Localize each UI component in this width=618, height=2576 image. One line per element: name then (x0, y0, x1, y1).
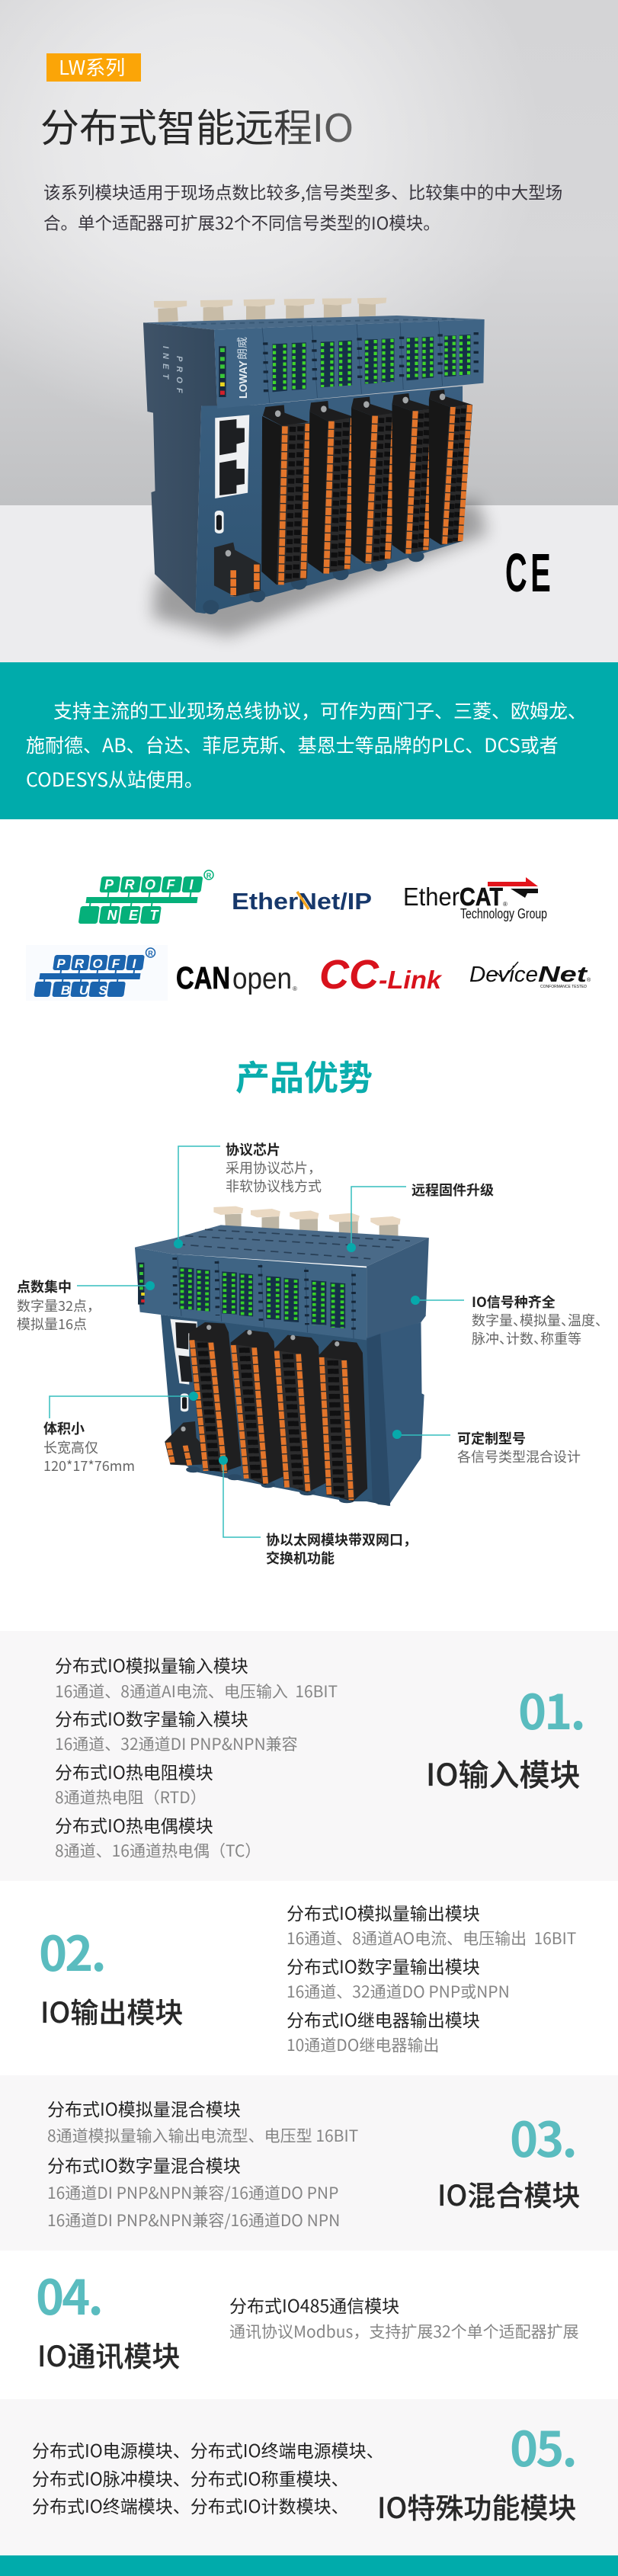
callout: customizable models: 可定制型号 (457, 1428, 526, 1448)
callout line: small size (50, 1392, 198, 1418)
module list: 8通道、16通道热电偶（TC） (55, 1839, 261, 1862)
terminal block 4 (392, 393, 437, 554)
support description (26, 697, 587, 793)
module list: 分布式IO模拟量输出模块 (287, 1899, 480, 1925)
product advantages diagram (49, 1145, 464, 1538)
heading: product advantages: 产品优势 (235, 1050, 373, 1100)
number 02: 02. (39, 1916, 104, 1985)
callout: small size (43, 1418, 135, 1475)
section heading: IO通讯模块 (37, 2334, 180, 2375)
module description: 分布式IO485通信模块 (229, 2292, 399, 2318)
logo: CC-Link (319, 952, 443, 998)
logo: DeviceNet: Net (538, 963, 588, 987)
module list (32, 2437, 384, 2518)
din clips (186, 1466, 390, 1506)
logo: PROFINET: T (149, 908, 160, 923)
module list: 分布式IO数字量输入模块 (55, 1705, 248, 1731)
logo: CANopen: open (232, 963, 292, 995)
logo: PROFINET: F (166, 877, 175, 892)
logo: PROFINET: I (189, 877, 194, 892)
support description: 施耐德、AB、台达、菲尼克斯、基恩士等品牌的PLC、DCS或者 (26, 731, 559, 758)
logo: PROFIBUS: I (133, 956, 137, 971)
module list: 8通道模拟量输入输出电流型、电压型 16BIT (47, 2124, 358, 2147)
module list: 分布式IO脉冲模块、分布式IO称重模块、 (32, 2465, 349, 2491)
module list: 10通道DO继电器输出 (287, 2033, 439, 2056)
module list: 分布式IO热电阻模块 (55, 1758, 213, 1784)
series tag: LW系列 (59, 53, 125, 81)
power connector (165, 1421, 203, 1466)
right side upper face (367, 1238, 429, 1340)
CE mark: CE (505, 543, 554, 604)
terminal block 2 (308, 401, 357, 574)
logo: EtherCAT Technology Group: Technology Group (460, 906, 547, 921)
module list: 16通道、32通道DI PNP&NPN兼容 (55, 1732, 298, 1755)
terminal block 5 (429, 389, 472, 545)
terminal block 1 (189, 1322, 242, 1473)
callout: complete IO signal types: 脉冲、计数、称重等 (472, 1328, 581, 1348)
callout: dual ethernet ports: 交换机功能 (266, 1548, 335, 1568)
panel: 02 output modules (0, 1881, 618, 2075)
logo: PROFIBUS: O (92, 956, 103, 971)
callout: concentrated points: 模拟量16点 (17, 1314, 87, 1334)
callout: small size: 120*17*76mm (43, 1456, 135, 1475)
logo: PROFIBUS: P (56, 956, 66, 971)
callout: remote firmware upgrade: 远程固件升级 (411, 1180, 494, 1200)
brand text on device: LOWAY (237, 360, 250, 399)
support description: CODESYS从站使用。 (26, 765, 203, 793)
protocol text on device side: INET (161, 346, 170, 383)
module description (229, 2292, 579, 2343)
logo: DeviceNet: Device (469, 963, 538, 987)
callout: concentrated points (17, 1277, 101, 1334)
intro text: 该系列模块适用于现场点数比较多,信号类型多、比较集中的中大型场 (43, 180, 562, 204)
callout line: firmware upgrade (347, 1187, 406, 1252)
callout line: IO signals (411, 1296, 464, 1305)
callout line: dual ethernet (219, 1456, 261, 1537)
callout: protocol chip (226, 1139, 322, 1196)
module list (55, 1652, 338, 1862)
din clips (203, 551, 424, 614)
series tag (46, 53, 141, 82)
terminal block 3 (274, 1335, 327, 1492)
panel: protocol support band (0, 662, 618, 819)
power connector (214, 543, 261, 597)
connector notches (175, 1258, 354, 1330)
LED band (214, 319, 485, 409)
lower front panel (196, 386, 463, 614)
number 03: 03. (510, 2102, 575, 2171)
logo: PROFINET: R (125, 877, 134, 892)
IO LED banks (273, 335, 471, 392)
brand text on device (235, 337, 250, 399)
ethernet ports (215, 415, 249, 498)
module list: 16通道、8通道AI电流、电压输入 16BIT (55, 1680, 338, 1703)
logo: DeviceNet: CONFORMANCE TESTED (540, 985, 587, 989)
logo: CANopen: CAN (176, 960, 230, 995)
logo: CANopen (176, 960, 297, 995)
module list: 16通道、8通道AO电流、电压输出 16BIT (287, 1927, 576, 1950)
panel: 04 communication modules (0, 2251, 618, 2399)
lower right face (367, 1322, 424, 1506)
callout line: points (77, 1281, 155, 1290)
module list: 16通道DI PNP&NPN兼容/16通道DO PNP (47, 2181, 338, 2204)
logo: EtherCAT Technology Group: ® (503, 901, 508, 908)
section heading: IO混合模块 (437, 2173, 580, 2214)
device (143, 298, 485, 614)
logo: PROFINET: O (145, 877, 155, 892)
usb port (215, 511, 224, 533)
lower front panel (161, 1315, 373, 1501)
module list: 分布式IO模拟量输入模块 (55, 1652, 248, 1677)
main title: 分布式智能远程IO (40, 97, 354, 153)
brand text on device: 朗威 (235, 337, 250, 360)
module list: 16通道DI PNP&NPN兼容/16通道DO NPN (47, 2209, 340, 2232)
logo: PROFIBUS: U (79, 983, 89, 998)
backdrop wall (0, 0, 618, 505)
IO LED banks (179, 1267, 345, 1328)
section heading: IO输出模块 (40, 1990, 183, 2031)
support description: 支持主流的工业现场总线协议，可作为西门子、三菱、欧姆龙、 (53, 697, 587, 724)
LED band (135, 1248, 367, 1340)
latches (154, 298, 386, 322)
callout: small size: 体积小 (43, 1418, 85, 1438)
footer band (0, 2555, 618, 2576)
logo: CC-Link: CC (319, 952, 379, 998)
logo: DeviceNet (469, 962, 591, 989)
callout: complete IO signal types (472, 1292, 609, 1348)
panel: 01 input modules (0, 1631, 618, 1881)
module list (287, 1899, 576, 2056)
logo: PROFINET: P (104, 877, 114, 892)
callout: protocol chip: 非软协议栈方式 (226, 1176, 322, 1196)
module list: 分布式IO终端模块、分布式IO计数模块、 (32, 2492, 349, 2518)
callout line: protocol chip (174, 1146, 220, 1248)
ethernet ports (170, 1319, 197, 1385)
protocol logos (34, 870, 591, 998)
module description: 通讯协议Modbus，支持扩展32个单个适配器扩展 (229, 2320, 579, 2343)
status LEDs (219, 346, 226, 397)
terminal block 4 (319, 1340, 367, 1501)
protocol text on device side: PROF (175, 356, 184, 398)
logo: PROFIBUS: R (148, 950, 153, 957)
product illustration: hero device and CE mark (143, 297, 554, 645)
callout: protocol chip: 协议芯片 (226, 1139, 280, 1159)
logo: PROFINET: E (129, 908, 139, 923)
panel: 05 special function modules (0, 2399, 618, 2555)
callout: small size: 长宽高仅 (43, 1437, 98, 1457)
terminal block 1 (261, 405, 312, 585)
number 04: 04. (36, 2260, 101, 2329)
logo: CC-Link: -Link (379, 966, 443, 994)
protocol text on device side (161, 346, 184, 398)
section heading: IO输入模块 (426, 1751, 581, 1795)
device shadow (152, 499, 488, 636)
logo: EtherNet/IP: EtherNet/IP (232, 888, 372, 915)
latches (213, 1206, 401, 1239)
logo: PROFINET: R (207, 872, 212, 879)
left side face (143, 322, 217, 612)
top face (143, 316, 485, 330)
module list: 16通道、32通道DO PNP或NPN (287, 1980, 510, 2003)
device (135, 1206, 429, 1506)
logo: PROFIBUS: S (98, 983, 107, 998)
connector notches (265, 332, 476, 393)
logo: PROFIBUS: B (61, 983, 70, 998)
module list: 分布式IO继电器输出模块 (287, 2006, 480, 2032)
callout: customizable models: 各信号类型混合设计 (457, 1447, 581, 1466)
status LEDs (138, 1263, 145, 1305)
top face (135, 1225, 429, 1267)
logo: PROFINET: N (107, 908, 117, 923)
callout line: custom model (392, 1430, 450, 1439)
module list (47, 2095, 358, 2232)
panel: hero background (0, 0, 618, 662)
terminal block 3 (351, 397, 399, 563)
module list: 分布式IO模拟量混合模块 (47, 2095, 241, 2121)
logo: CANopen: ® (293, 985, 297, 992)
callout: complete IO signal types: 数字量、模拟量、温度、 (472, 1310, 609, 1330)
module list: 分布式IO数字量混合模块 (47, 2151, 241, 2177)
logo: EtherCAT Technology Group (403, 877, 547, 921)
logo: DeviceNet: ® (587, 977, 591, 983)
intro text: 合。单个适配器可扩展32个不同信号类型的IO模块。 (43, 210, 440, 235)
module list: 分布式IO数字量输出模块 (287, 1953, 480, 1978)
terminal block 2 (231, 1330, 284, 1485)
callout: concentrated points: 数字量32点， (17, 1296, 101, 1315)
callout: concentrated points: 点数集中 (17, 1277, 72, 1296)
module list: 分布式IO电源模块、分布式IO终端电源模块、 (32, 2437, 384, 2462)
logo: EtherCAT Technology Group: Ether (403, 883, 459, 911)
module list: 分布式IO热电偶模块 (55, 1812, 213, 1837)
number 01: 01. (518, 1674, 584, 1744)
logo: PROFIBUS (26, 945, 168, 1001)
section heading: IO特殊功能模块 (377, 2485, 576, 2526)
callout: customizable models (457, 1428, 581, 1466)
panel: 03 mixed modules (0, 2075, 618, 2251)
callout: dual ethernet ports: 协以太网模块带双网口， (266, 1530, 417, 1549)
usb port (181, 1393, 188, 1411)
logo: PROFIBUS: R (75, 956, 85, 971)
callout: dual ethernet ports (266, 1530, 417, 1568)
logo: PROFIBUS: F (112, 956, 120, 971)
logo: PROFINET (78, 870, 213, 924)
callout: complete IO signal types: IO信号种齐全 (472, 1292, 556, 1312)
logo: EtherCAT Technology Group: CAT (459, 883, 503, 911)
module list: 8通道热电阻（RTD） (55, 1786, 207, 1809)
intro text (43, 180, 562, 235)
callout: protocol chip: 采用协议芯片， (226, 1158, 322, 1177)
number 05: 05. (510, 2411, 575, 2481)
